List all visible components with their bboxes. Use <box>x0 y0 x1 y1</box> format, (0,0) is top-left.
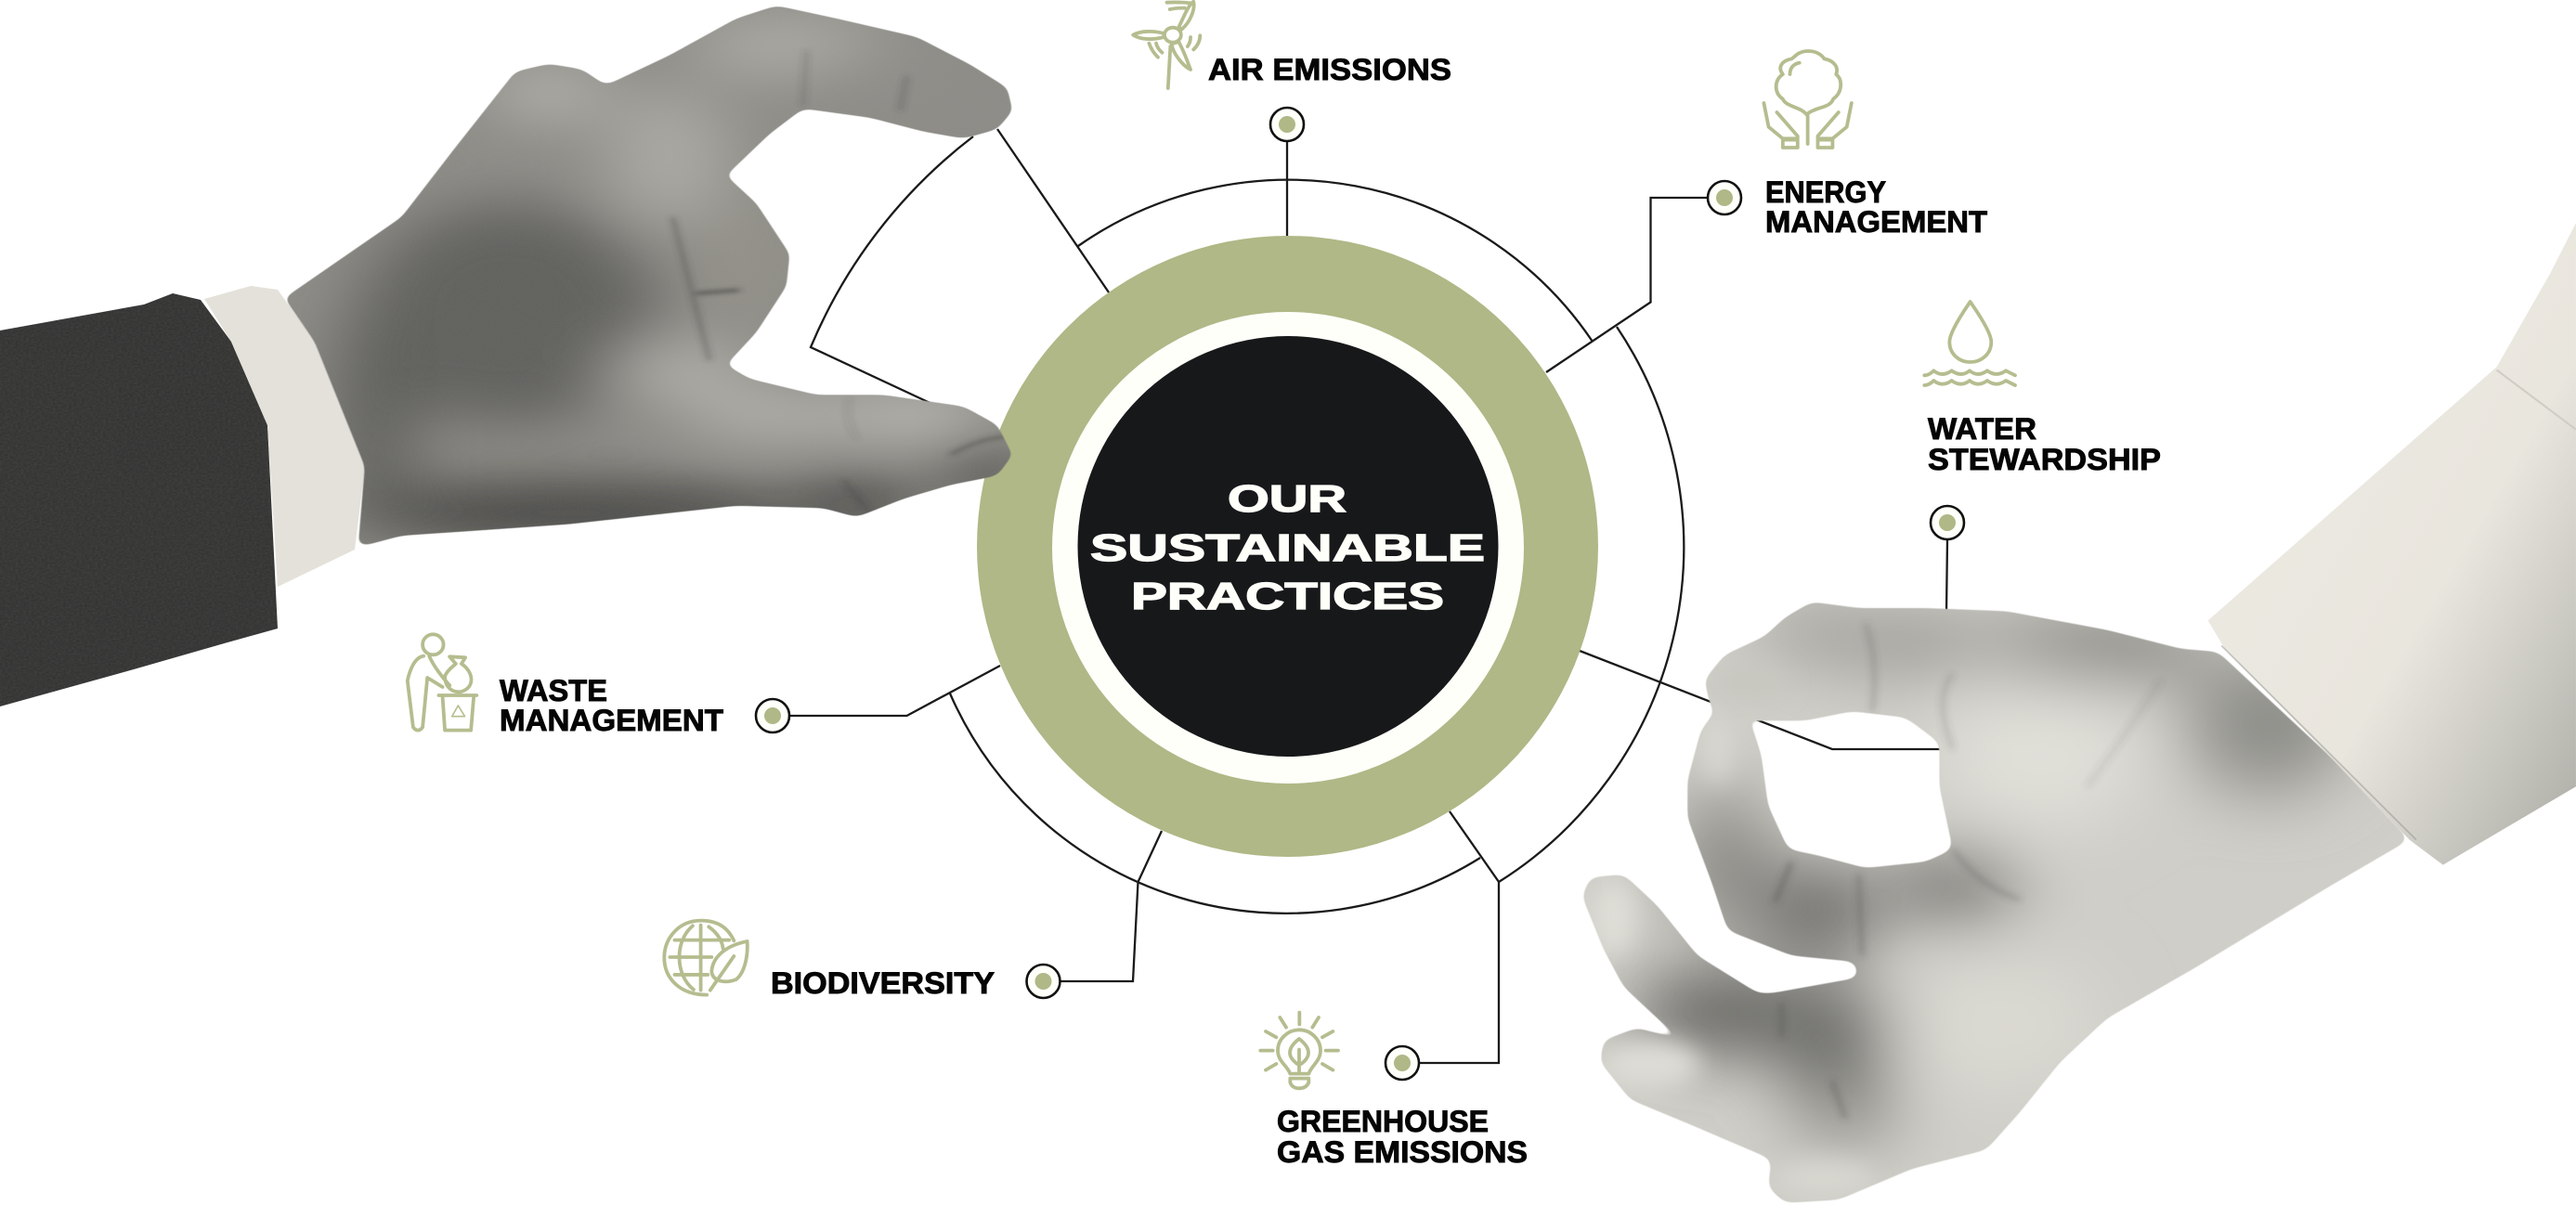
central hub <box>977 236 1598 857</box>
label: AIR EMISSIONS <box>1208 53 1451 86</box>
icon: tree in hands <box>1763 51 1852 148</box>
label: WASTE <box>500 674 607 707</box>
label <box>1928 412 2161 476</box>
marker <box>1931 506 1964 539</box>
connector: waste management <box>789 666 1000 716</box>
label <box>1765 175 1987 239</box>
hub outer green ring <box>977 236 1598 857</box>
air emissions item <box>1133 2 1451 141</box>
hand shape <box>1563 586 2437 1205</box>
label: ENERGY <box>1765 175 1886 209</box>
label: MANAGEMENT <box>1765 205 1987 239</box>
suit sleeve <box>0 293 278 706</box>
marker <box>1270 108 1304 141</box>
hub cream ring <box>1052 312 1524 784</box>
hub dark disc <box>1077 336 1499 757</box>
connector: air emissions <box>1286 141 1288 238</box>
ring segment: pinched wedge between the fingers <box>811 129 1109 407</box>
icon: light bulb with leaf <box>1260 1013 1338 1088</box>
ring segment: top arc <box>1078 180 1593 342</box>
hub title: PRACTICES <box>1131 575 1444 617</box>
biodiversity item <box>664 921 1060 1000</box>
water stewardship item <box>1924 302 2161 539</box>
shirt cuff <box>204 286 365 587</box>
hub title: SUSTAINABLE <box>1090 526 1485 569</box>
hand shape <box>267 0 1037 554</box>
label <box>1277 1105 1528 1169</box>
marker <box>1386 1046 1419 1080</box>
energy management item <box>1708 51 1987 239</box>
connector: greenhouse gas emissions <box>1419 811 1499 1063</box>
icon: globe with leaf <box>664 921 748 995</box>
ring segment: lower arc <box>950 693 1480 913</box>
hub title <box>1090 477 1485 617</box>
label: GAS EMISSIONS <box>1277 1135 1528 1169</box>
connector: water stewardship <box>1946 539 1947 613</box>
marker <box>1027 965 1060 998</box>
right hand with shirt sleeve <box>1563 223 2576 1205</box>
label <box>500 674 723 737</box>
marker <box>756 699 789 732</box>
waste management item <box>408 634 789 737</box>
icon: person with recycling bin <box>408 634 476 731</box>
hub title: OUR <box>1228 477 1347 520</box>
label: MANAGEMENT <box>500 704 723 737</box>
shirt sleeve <box>2194 223 2576 875</box>
icon: wind turbine <box>1133 2 1200 88</box>
label: BIODIVERSITY <box>771 966 995 1000</box>
greenhouse gas emissions item <box>1260 1013 1528 1169</box>
label: STEWARDSHIP <box>1928 443 2161 476</box>
label: WATER <box>1928 412 2036 446</box>
label: GREENHOUSE <box>1277 1105 1489 1138</box>
connector: pinch to hand <box>1580 651 1943 749</box>
left hand with suit sleeve <box>0 0 1037 724</box>
ring segment: right arc <box>1499 327 1684 882</box>
connector: energy management <box>1546 198 1708 372</box>
icon: water drop with waves <box>1924 302 2015 385</box>
connector: biodiversity <box>1060 831 1162 981</box>
marker <box>1708 181 1741 214</box>
